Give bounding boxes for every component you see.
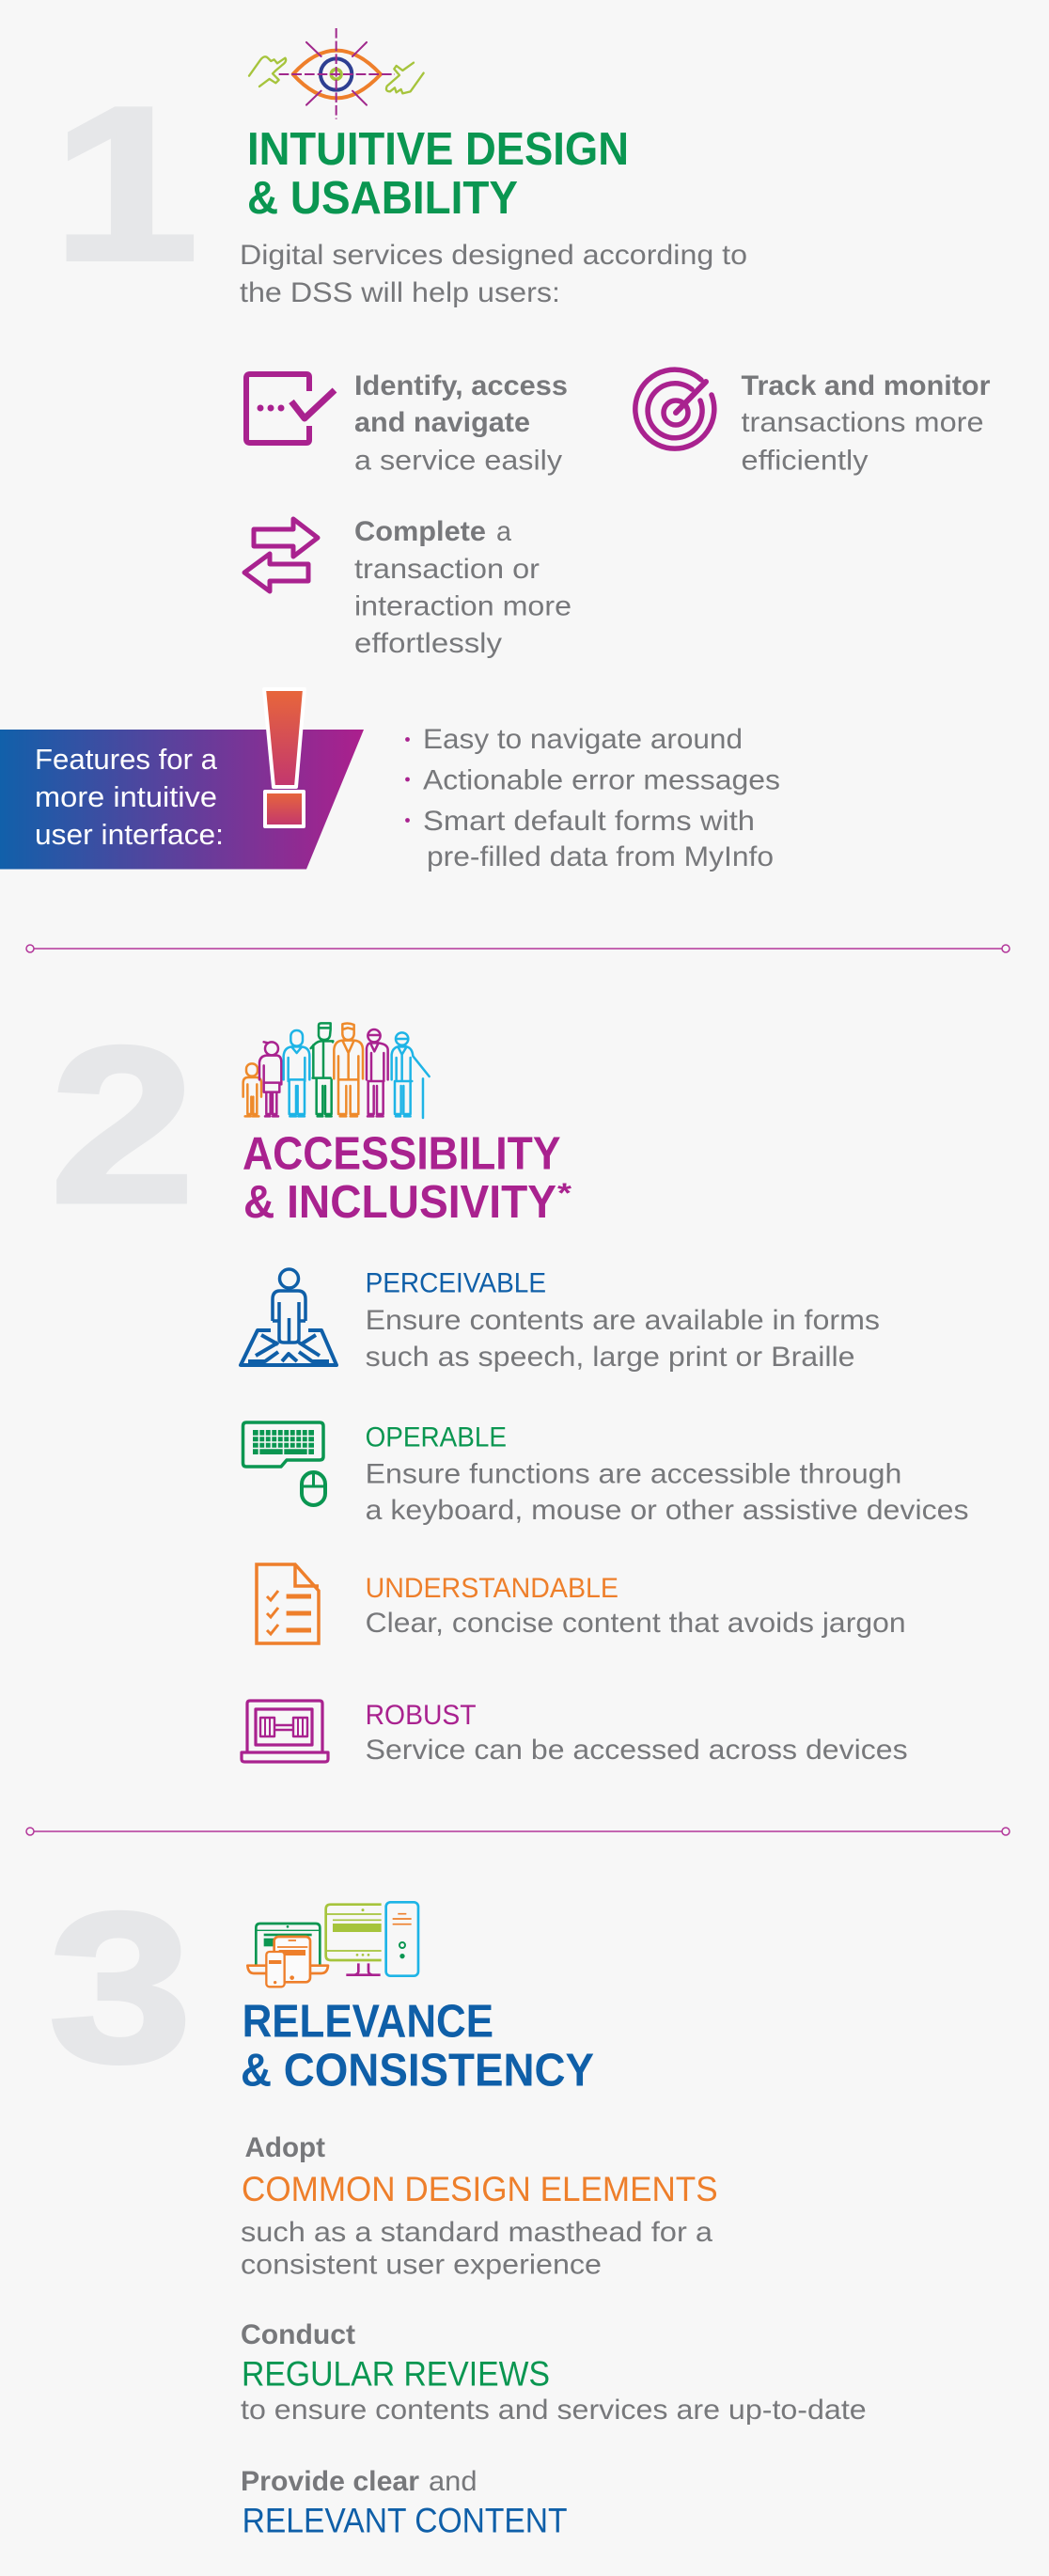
item: perceivable: PERCEIVABLE <box>366 1268 546 1299</box>
banner: features: more intuitive <box>35 780 217 813</box>
number 3: 3 <box>49 1869 192 2107</box>
banner: features: Features for a <box>35 743 218 776</box>
icon: target <box>635 369 714 448</box>
item: track <box>741 370 991 476</box>
heading: * <box>557 1178 571 1209</box>
item: understandable <box>366 1573 906 1639</box>
intro text <box>240 240 747 308</box>
item: complete: interaction more <box>354 590 571 622</box>
heading <box>243 1128 571 1228</box>
icon: person at crossroads <box>241 1269 337 1365</box>
panel: section 2 accessibility and inclusivity <box>51 1001 969 1766</box>
item: perceivable <box>366 1268 880 1373</box>
item: operable <box>366 1422 969 1526</box>
icon: laptop <box>242 1701 328 1762</box>
item: complete <box>354 516 571 659</box>
item: relevant content <box>241 2466 568 2540</box>
icon: eye with hands <box>249 28 424 119</box>
item: robust: ROBUST <box>366 1700 477 1731</box>
heading <box>241 1996 594 2097</box>
item: operable: OPERABLE <box>366 1422 507 1453</box>
item: common design elements <box>241 2132 718 2281</box>
item: track: Track and monitor <box>741 370 991 401</box>
item: track: efficiently <box>741 446 869 476</box>
feature list <box>405 724 780 872</box>
heading: & USABILITY <box>247 172 518 224</box>
item: robust: Service can be accessed across devices <box>366 1735 908 1766</box>
item: regular reviews: REGULAR REVIEWS <box>242 2354 550 2393</box>
item: complete: effortlessly <box>354 628 502 659</box>
item: relevant content: RELEVANT CONTENT <box>243 2501 568 2540</box>
item: regular reviews: to ensure contents and services are up-to-date <box>241 2395 867 2426</box>
panel: section 3 relevance and consistency <box>49 1869 867 2540</box>
item: robust <box>366 1700 908 1766</box>
icon: group of people <box>243 1023 430 1118</box>
heading: & CONSISTENCY <box>241 2044 594 2097</box>
item: complete: transaction or <box>354 554 540 585</box>
icon: exchange arrows <box>244 519 318 591</box>
item: operable: Ensure functions are accessible through <box>366 1459 901 1490</box>
heading <box>247 123 629 224</box>
icon: multiple devices <box>247 1902 418 1987</box>
item: identify: and navigate <box>354 407 530 438</box>
number 1: 1 <box>53 62 198 306</box>
item: operable: a keyboard, mouse or other assistive devices <box>366 1495 969 1526</box>
heading: RELEVANCE <box>243 1996 493 2048</box>
item: common design elements: Adopt <box>244 2132 325 2163</box>
item: perceivable: Ensure contents are available in forms <box>366 1305 880 1336</box>
item: complete: a <box>496 516 511 547</box>
item: common design elements: COMMON DESIGN ELEMENTS <box>242 2170 718 2208</box>
item: understandable: Clear, concise content that avoids jargon <box>366 1608 906 1639</box>
item: common design elements: such as a standard masthead for a <box>241 2217 712 2248</box>
feature list: Actionable error messages <box>423 765 780 795</box>
item: regular reviews: Conduct <box>241 2319 355 2350</box>
intro text: the DSS will help users: <box>240 277 560 308</box>
item: perceivable: such as speech, large print or Braille <box>366 1342 855 1373</box>
number 2: 2 <box>51 1001 195 1249</box>
icon: checklist document <box>257 1564 319 1643</box>
item: relevant content: Provide clear <box>241 2466 419 2497</box>
banner: features <box>0 730 364 869</box>
icon: form with check <box>246 374 335 443</box>
heading: ACCESSIBILITY <box>243 1128 560 1180</box>
item: identify: a service easily <box>354 446 562 476</box>
icon: keyboard and mouse <box>243 1422 325 1505</box>
item: regular reviews <box>241 2319 867 2426</box>
heading: INTUITIVE DESIGN <box>247 123 629 175</box>
item: track: transactions more <box>741 407 983 438</box>
intro text: Digital services designed according to <box>240 240 747 271</box>
feature list: Easy to navigate around <box>423 724 743 755</box>
banner: features: user interface: <box>35 818 224 851</box>
panel: section 1 intuitive design and usability <box>0 28 991 872</box>
item: common design elements: consistent user experience <box>241 2250 602 2281</box>
feature list: Smart default forms with <box>423 806 755 837</box>
icon: exclamation mark <box>264 689 305 826</box>
item: relevant content: and <box>429 2466 478 2497</box>
item: identify: Identify, access <box>354 370 568 401</box>
heading: & INCLUSIVITY <box>243 1176 556 1228</box>
item: understandable: UNDERSTANDABLE <box>366 1573 618 1604</box>
item: identify <box>354 370 568 476</box>
feature list: pre-filled data from MyInfo <box>427 841 774 872</box>
item: complete: Complete <box>354 516 486 547</box>
